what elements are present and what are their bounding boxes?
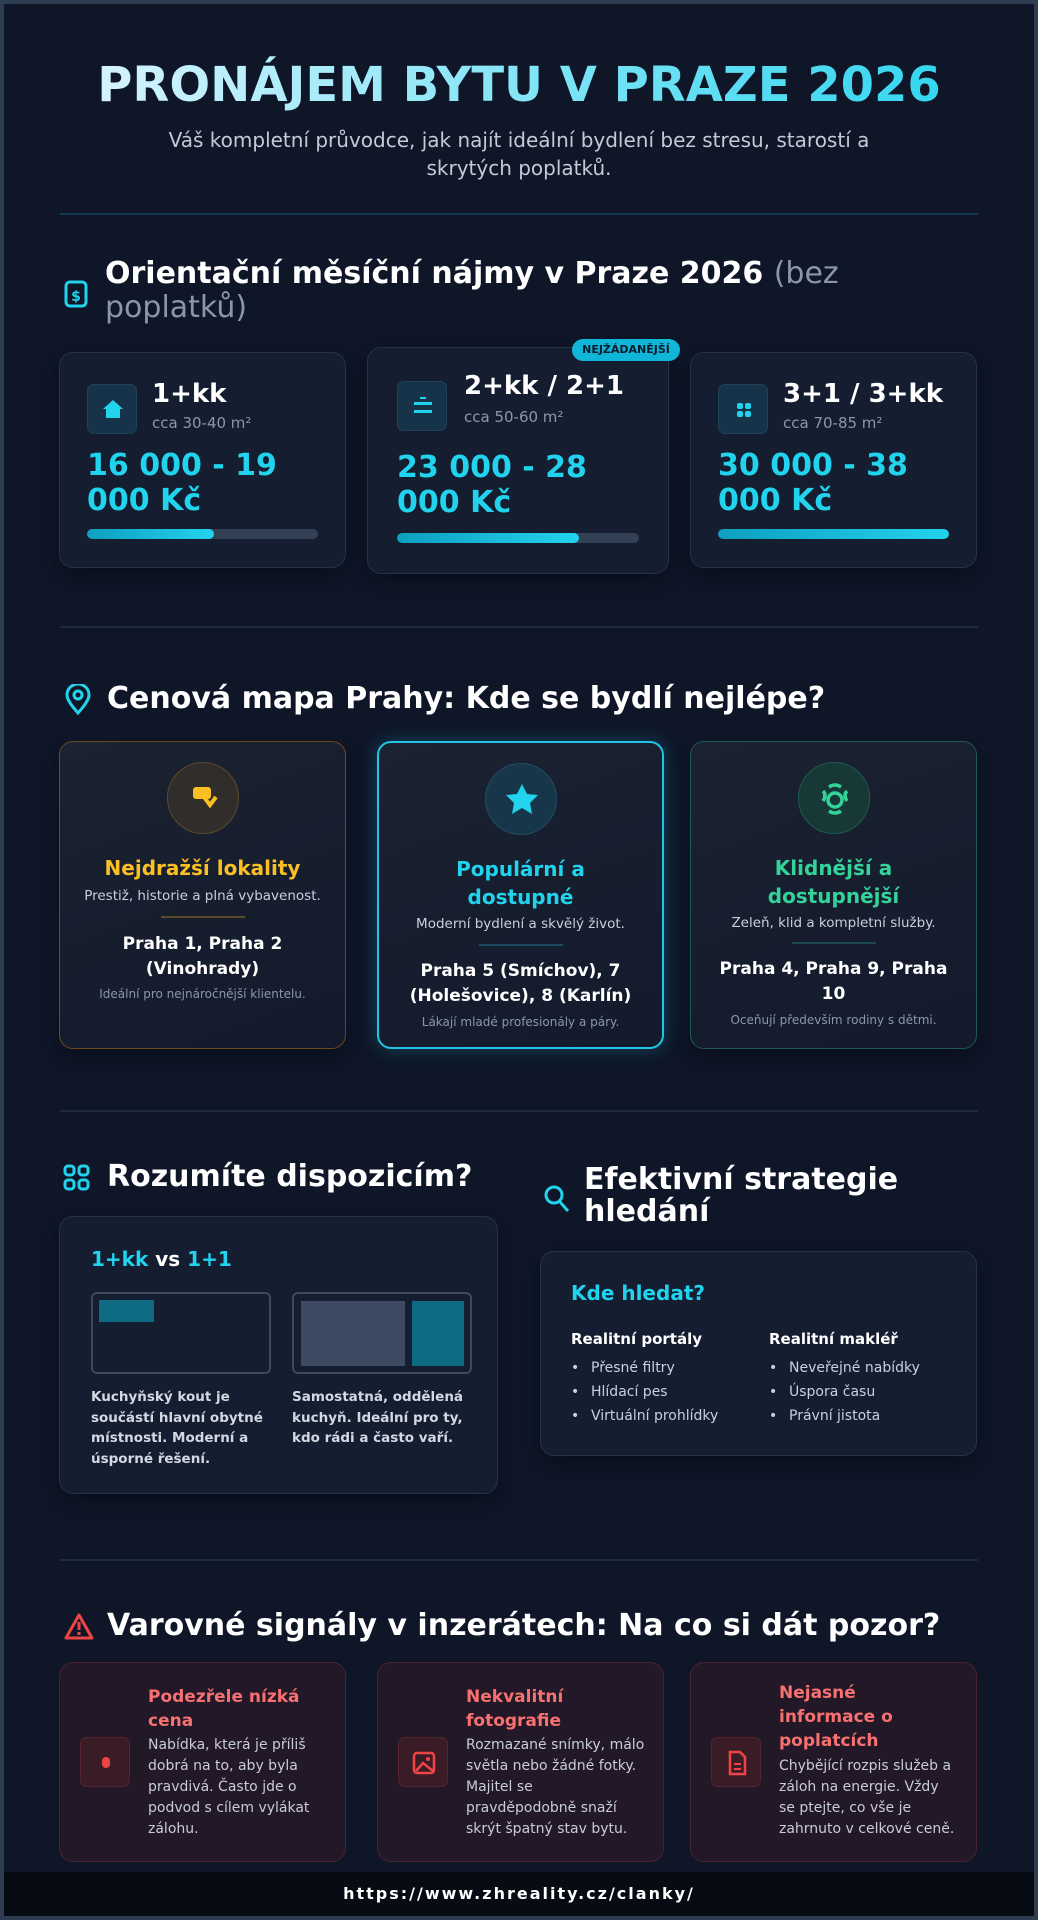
panel: popular: Moderní bydlení a skvělý život. xyxy=(416,916,625,932)
badge xyxy=(572,339,680,361)
card: 3+1: 3+1 / 3+kk xyxy=(783,379,943,409)
panel: bad photos xyxy=(377,1662,664,1862)
icon: price tag xyxy=(64,280,88,308)
panel: 1+kk vs 1+1 xyxy=(59,1216,498,1494)
panel: where to search: Neveřejné nabídky xyxy=(789,1360,920,1376)
heading: dispositions: Rozumíte dispozicím? xyxy=(107,1159,472,1194)
panel: expensive: Ideální pro nejnáročnější klientelu. xyxy=(99,987,306,1001)
panel: where to search: Úspora času xyxy=(789,1384,875,1400)
card: 2+kk: 23 000 - 28 xyxy=(397,450,587,485)
icon: green xyxy=(798,762,870,834)
panel: where to search: Realitní makléř xyxy=(769,1330,898,1348)
panel: bad photos: pravděpodobně snaží skrýt špatný stav bytu. xyxy=(466,1800,627,1837)
panel: unclear fees: informace o xyxy=(779,1707,893,1727)
heading: rents: Orientační měsíční nájmy v Praze 2026 (bez poplatků) xyxy=(105,256,839,325)
panel: calm: Klidnější a xyxy=(775,856,892,880)
panel: calm: Zeleň, klid a kompletní služby. xyxy=(731,915,936,931)
card: 2+kk: cca 50-60 m² xyxy=(464,408,563,426)
icon: warning xyxy=(64,1613,94,1640)
footer: https://www.zhreality.cz/clanky/ xyxy=(343,1884,695,1903)
diagram: 1+1 xyxy=(292,1292,472,1374)
icon: grid xyxy=(64,1164,90,1190)
panel: bad photos: Nekvalitní xyxy=(466,1687,563,1707)
card: 1+kk: 16 000 - 19 xyxy=(87,448,277,483)
panel: where to search: Právní jistota xyxy=(789,1408,880,1424)
panel: 1+kk vs 1+1: Kuchyňský kout je součástí hlavní obytné místnosti. Moderní a úsporné řešení. xyxy=(91,1389,263,1466)
panel: calm: dostupnější xyxy=(768,884,899,908)
panel: expensive: Prestiž, historie a plná vybavenost. xyxy=(84,888,321,904)
heading: map: Cenová mapa Prahy: Kde se bydlí nejlépe? xyxy=(107,681,825,716)
panel: unclear fees xyxy=(690,1662,977,1862)
panel: popular: Lákají mladé profesionály a páry. xyxy=(422,1015,619,1029)
heading: warnings: Varovné signály v inzerátech: Na co si dát pozor? xyxy=(107,1608,940,1643)
diagram: 1+kk xyxy=(91,1292,271,1374)
panel: popular: dostupné xyxy=(468,885,573,909)
icon: house xyxy=(87,384,137,434)
panel: low price: Nabídka, která je příliš dobrá na to, aby byla pravdivá. Často jde o podvod s cílem vylákat zálohu. xyxy=(148,1737,309,1837)
panel: 1+kk vs 1+1: Samostatná, oddělená kuchyň. Ideální pro ty, kdo rádi a často vaří. xyxy=(292,1389,463,1446)
card: 3+1: cca 70-85 m² xyxy=(783,414,882,432)
panel: popular: (Holešovice), 8 (Karlín) xyxy=(410,986,631,1006)
panel: where to search xyxy=(540,1251,977,1456)
icon: pin xyxy=(66,684,90,716)
panel: unclear fees: Chybějící rozpis služeb a záloh na energie. Vždy xyxy=(779,1758,951,1795)
card: 1+kk: cca 30-40 m² xyxy=(152,414,251,432)
panel: calm xyxy=(690,741,977,1049)
subtitle: Váš kompletní průvodce, jak najít ideální bydlení bez stresu, starostí a skrytých poplatků. xyxy=(169,128,869,180)
panel: low price: Podezřele nízká xyxy=(148,1687,300,1707)
panel: expensive: Praha 1, Praha 2 xyxy=(123,934,282,954)
icon: yellow xyxy=(166,762,238,834)
panel: low price: cena xyxy=(148,1711,193,1731)
panel: where to search: Realitní portály xyxy=(571,1330,702,1348)
panel: unclear fees: poplatcích xyxy=(779,1731,879,1751)
card: 2+kk: 2+kk / 2+1 xyxy=(464,371,624,401)
panel: low price xyxy=(59,1662,346,1862)
icon: search xyxy=(544,1186,569,1212)
panel: expensive: Nejdražší lokality xyxy=(105,856,300,880)
card: 1+kk: 1+kk xyxy=(152,379,226,409)
panel: bad photos: Rozmazané snímky, málo světla nebo žádné fotky. Majitel se xyxy=(466,1737,644,1795)
panel: 1+kk vs 1+1: 1+kk vs 1+1 xyxy=(91,1247,232,1271)
icon: price tag: $ xyxy=(71,289,81,305)
panel: popular: Praha 5 (Smíchov), 7 xyxy=(420,961,621,981)
panel: bad photos: fotografie xyxy=(466,1711,561,1731)
card: 2+kk xyxy=(367,347,669,574)
panel: where to search: Hlídací pes xyxy=(591,1384,668,1400)
card: 1+kk xyxy=(59,352,346,568)
panel: expensive: (Vinohrady) xyxy=(146,959,259,979)
panel: where to search: Virtuální prohlídky xyxy=(591,1408,718,1424)
panel: unclear fees: se ptejte, co vše je zahrnuto v celkové ceně. xyxy=(779,1800,954,1837)
icon: star xyxy=(484,763,556,835)
card: 3+1 xyxy=(690,352,977,568)
card: 3+1: 30 000 - 38 xyxy=(718,448,908,483)
panel: where to search: Kde hledat? xyxy=(571,1281,705,1305)
title: PRONÁJEM BYTU V PRAZE 2026 xyxy=(97,57,941,113)
panel: calm: Praha 4, Praha 9, Praha xyxy=(720,959,947,979)
panel: popular: Populární a xyxy=(456,857,585,881)
panel: popular xyxy=(377,741,664,1049)
card: 2+kk: 000 Kč xyxy=(397,485,511,520)
panel: calm: Oceňují především rodiny s dětmi. xyxy=(730,1013,937,1027)
panel: expensive xyxy=(59,741,346,1049)
heading: strategy: Efektivní strategie hledání xyxy=(584,1162,898,1229)
card: 3+1: 000 Kč xyxy=(718,483,832,518)
panel: unclear fees: Nejasné xyxy=(779,1683,856,1703)
panel: calm: 10 xyxy=(822,984,845,1004)
footer xyxy=(4,1872,1034,1916)
card: 1+kk: 000 Kč xyxy=(87,483,201,518)
panel: where to search: Přesné filtry xyxy=(591,1360,675,1376)
badge: NEJŽÁDANĚJŠÍ xyxy=(582,343,670,356)
